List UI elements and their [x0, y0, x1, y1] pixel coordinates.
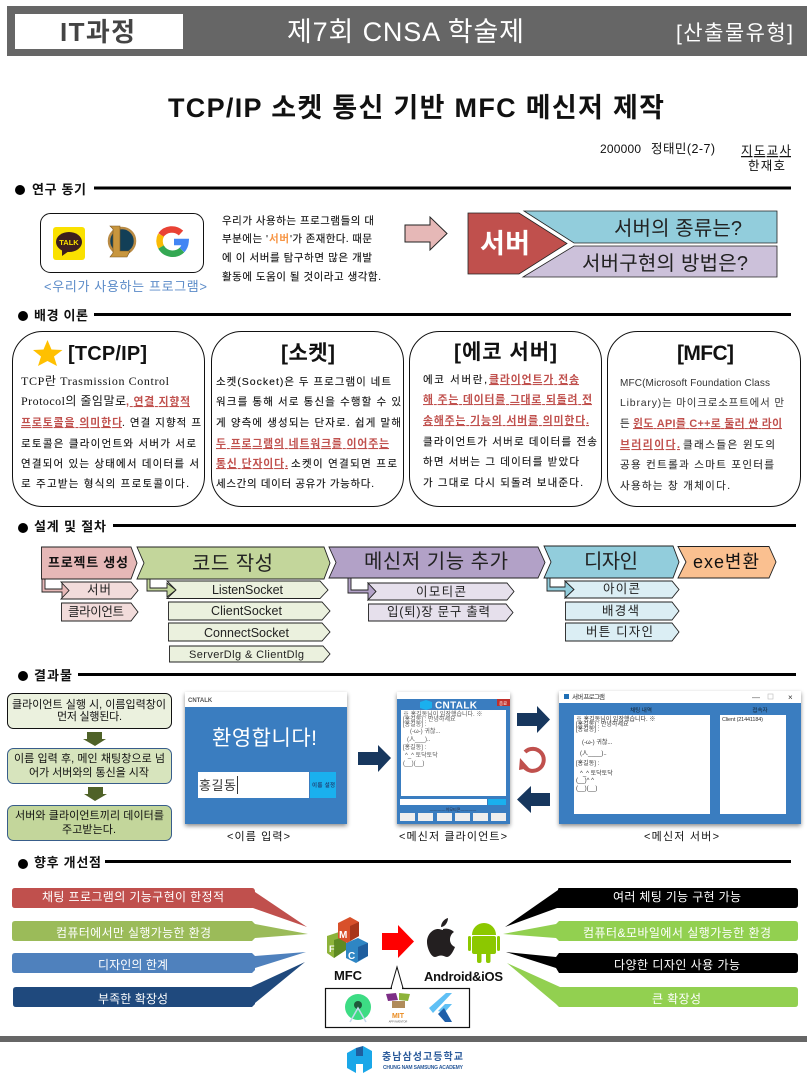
motivation text: 부분에는 ' — [222, 233, 268, 245]
text: echo server description: 송해주는 기능의 서버를 의미한다. — [423, 413, 589, 427]
item: emoticons: 이모티콘 — [416, 585, 466, 599]
text: echo server description: 에코 서버란, — [423, 374, 487, 386]
screenshot: messenger server: [홍길동] : — [576, 725, 600, 733]
text: echo server description: 해 주는 데이터를 그대로 되돌려 전 — [423, 392, 592, 406]
screenshot: messenger server: (__)^ ^ — [576, 778, 594, 784]
callout: mobile tools — [326, 967, 470, 1028]
screenshot: messenger client: [홍길동] : 안녕하세요 — [403, 715, 456, 723]
screenshot: name input — [185, 692, 347, 824]
text: socket description: 두 프로그램의 네트워크를 이어주는 — [216, 437, 389, 450]
advisor — [741, 144, 791, 173]
text: socket description: 소켓(Socket)은 두 프로그램이 네트 — [216, 376, 391, 388]
step 3 — [8, 806, 172, 840]
icon: Android Studio — [345, 994, 371, 1022]
diagram: server questions — [468, 211, 777, 277]
item: ServerDlg and ClientDlg — [170, 646, 330, 662]
text: MFC description: 공용 컨트롤과 스마트 포인터를 — [620, 459, 774, 471]
question: server implementation: 서버구현의 방법은? — [582, 252, 748, 275]
caption: messenger server: <메신저 서버> — [644, 830, 719, 843]
arrow: client to server — [517, 706, 550, 733]
heading: echo server: [에코 서버] — [454, 341, 557, 364]
heading: MFC: [MFC] — [677, 342, 734, 365]
item: ClientSocket: ClientSocket — [211, 604, 283, 618]
school name: 충남삼성고등학교 — [382, 1050, 463, 1063]
screenshot: messenger server: × — [788, 693, 793, 702]
heading: socket: [소켓] — [281, 342, 335, 365]
callout: computer and mobile: 컴퓨터&모바일에서 실행가능한 환경 — [583, 925, 771, 940]
icon: MFC cubes — [327, 917, 368, 963]
screenshot: messenger server: ※ 홍길동님이 입장했습니다. ※ — [576, 715, 655, 723]
question: server types: 서버의 종류는? — [614, 217, 742, 240]
screenshot: name input: CNTALK — [188, 698, 213, 704]
callout: design options — [506, 952, 798, 973]
question: server types — [524, 211, 777, 243]
screenshot: messenger client: CNTALK — [435, 700, 478, 712]
step: messenger features — [329, 547, 545, 578]
text: TCP/IP description: , 연결 지향적 — [126, 394, 190, 408]
arrow: to server — [405, 217, 447, 250]
step 2 — [8, 748, 172, 784]
callout: limited features: 채팅 프로그램의 기능구현이 한정적 — [42, 890, 224, 904]
screenshot: messenger client: (人___).. — [407, 736, 431, 743]
item: icon — [565, 581, 679, 598]
screenshot: messenger client: (__)(__) — [403, 761, 424, 767]
item: client: 클라이언트 — [68, 605, 124, 619]
screenshot: messenger server — [559, 691, 801, 824]
item: ConnectSocket: ConnectSocket — [204, 626, 290, 640]
screenshot: messenger client: ^_^ 토닥토닥 — [405, 752, 438, 759]
icon: Android — [468, 923, 500, 963]
icon: Flutter — [429, 993, 452, 1022]
advisor: 한재호 — [748, 159, 785, 173]
text: socket description: 세스간의 데이터 공유가 가능하다. — [216, 477, 374, 490]
item: server: 서버 — [87, 583, 111, 597]
icon: MIT App Inventor — [386, 993, 410, 1024]
callout: computer and mobile — [503, 921, 798, 941]
text: socket description: 통신 단자이다. — [216, 456, 288, 470]
text: TCP/IP description: 프로토콜을 의미한다 — [21, 415, 122, 429]
elbow arrow: code — [147, 579, 176, 597]
step 1: 먼저 실행된다. — [57, 710, 122, 723]
section heading: motivation: 연구 동기 — [32, 182, 86, 197]
text: MFC description: 윈도 API를 C++로 둘러 싼 라이 — [633, 417, 782, 430]
icon: refresh — [519, 749, 544, 771]
caption: programs: <우리가 사용하는 프로그램> — [44, 279, 207, 294]
cube M: M — [339, 930, 347, 941]
panel: TCP/IP — [12, 332, 204, 506]
callout: poor scalability: 부족한 확장성 — [98, 992, 168, 1006]
arrow: migration — [382, 925, 414, 958]
section heading: results — [18, 668, 796, 683]
icon: KakaoTalk — [53, 227, 85, 260]
item: ServerDlg and ClientDlg: ServerDlg & ClientDlg — [189, 649, 304, 661]
text: socket description: 소켓이 연결되면 프로 — [291, 458, 397, 470]
item: button design: 버튼 디자인 — [586, 625, 653, 639]
callout: high scalability: 큰 확장성 — [652, 992, 701, 1006]
item: icon: 아이콘 — [603, 582, 640, 596]
text: TCP/IP description: . 연결 지향적 프 — [122, 417, 201, 429]
text: echo server description: 가 그대로 다시 되돌려 보내준다. — [423, 477, 583, 489]
event title: 제7회 CNSA 학술제 — [287, 17, 524, 47]
heading: TCP/IP: [TCP/IP] — [68, 343, 147, 365]
callout: design options: 다양한 디자인 사용 가능 — [614, 958, 740, 972]
item: emoticons — [368, 583, 514, 600]
callout: multiple features — [505, 888, 798, 927]
server block: 서버 — [480, 229, 530, 259]
callout: limited features — [12, 888, 307, 927]
item: server — [61, 582, 138, 599]
step: exe conversion: exe변환 — [693, 552, 759, 572]
text: MFC description: 든 — [620, 418, 630, 430]
icon: school emblem — [347, 1046, 372, 1073]
school name in English: CHUNG NAM SAMSUNG ACADEMY — [383, 1065, 464, 1071]
screenshot: messenger server: (-ω-) 귀찮... — [582, 738, 613, 746]
screenshot: messenger client: 종료 — [499, 701, 507, 706]
text: MFC description: Library)는 마이크로소프트에서 만 — [620, 397, 784, 409]
item: ConnectSocket — [168, 623, 330, 641]
screenshot: name input: 홍길동 — [199, 778, 236, 793]
flow: procedure — [42, 546, 776, 662]
text: echo server description: 클라이언트가 서버로 데이터를 전송 — [423, 436, 597, 448]
callout: design limits: 디자인의 한계 — [98, 958, 168, 972]
step: code writing: 코드 작성 — [192, 552, 273, 575]
text: echo server description: 하면 서버는 그 데이터를 받았다 — [423, 455, 579, 468]
section heading: future improvements: 향후 개선점 — [34, 855, 101, 870]
text: TCP/IP description: 로 주고받는 형식의 프로토콜이다. — [21, 478, 189, 490]
screenshot: messenger server: ^_^ 토닥토닥 — [580, 770, 613, 777]
author — [600, 142, 715, 156]
icon: KakaoTalk: TALK — [59, 238, 79, 247]
screenshot: messenger server: Client (21441184) — [722, 717, 763, 723]
item: enter and exit message: 입(퇴)장 문구 출력 — [387, 605, 490, 619]
screenshot: messenger client — [397, 692, 510, 824]
text: TCP/IP description — [21, 374, 201, 490]
section heading: background — [18, 308, 791, 323]
category badge — [15, 14, 183, 49]
panel: echo server — [410, 332, 602, 506]
item: client — [62, 603, 138, 621]
author: 200000 — [600, 142, 641, 156]
text: MFC description — [620, 378, 784, 492]
caption: name input: <이름 입력> — [227, 830, 290, 843]
arrow down — [83, 732, 106, 746]
screenshot: messenger server: [홍길동] : — [576, 759, 600, 767]
callout: design limits — [12, 952, 306, 973]
elbow arrow: design — [547, 578, 574, 598]
step: design — [544, 546, 679, 578]
label: MFC: MFC — [334, 968, 363, 983]
section heading: design and procedure — [18, 519, 796, 534]
step 2: 어가 서버와의 통신을 시작 — [29, 766, 149, 779]
motivation text: 우리가 사용하는 프로그램들의 대 — [222, 214, 374, 227]
question: server implementation — [523, 246, 777, 277]
item: enter and exit message — [368, 604, 513, 621]
panel: socket — [212, 332, 404, 506]
screenshot: messenger client: (-ω-) 귀찮... — [410, 727, 441, 735]
cube F: F — [329, 944, 335, 954]
text: socket description — [216, 376, 401, 490]
screenshot: messenger server: [홍길동] : 안녕하세요 — [576, 720, 629, 728]
screenshot: messenger server: — — [752, 693, 760, 702]
screenshot: messenger client: ※ 홍길동님이 입장했습니다. ※ — [403, 710, 482, 718]
callout: high scalability — [507, 963, 798, 1007]
icon: star — [33, 340, 62, 366]
screenshot: name input: 환영합니다! — [212, 727, 317, 750]
category badge: IT과정 — [60, 17, 135, 47]
output type: [산출물유형] — [676, 22, 793, 45]
motivation text: '가 존재한다. 때문 — [290, 233, 372, 245]
section heading: motivation — [15, 182, 791, 197]
text: TCP/IP description: 연결되어 있는 상태에서 데이터를 서 — [21, 458, 199, 470]
step: exe conversion — [678, 546, 776, 578]
arrow down — [84, 787, 107, 801]
screenshot: name input: 이름 설정 — [312, 781, 335, 789]
cube C: C — [348, 951, 355, 962]
item: background colour: 배경색 — [602, 604, 639, 618]
icon: League of Legends — [109, 226, 135, 257]
flowchart: client steps — [8, 694, 172, 840]
screenshot: messenger client: [홍길동] : — [403, 743, 427, 751]
step 3: 서버와 클라이언트끼리 데이터를 — [15, 809, 164, 822]
screenshot: messenger server: (人____).. — [580, 750, 607, 757]
step: messenger features: 메신저 기능 추가 — [364, 550, 508, 573]
step: design: 디자인 — [584, 550, 638, 573]
item: ClientSocket — [168, 602, 330, 620]
text: TCP/IP description: TCP란 Trasmission Control — [21, 374, 170, 388]
advisor: 지도교사 — [741, 144, 791, 158]
title: TCP/IP 소켓 통신 기반 MFC 메신저 제작 — [168, 93, 664, 123]
arrow: to client — [358, 745, 391, 772]
motivation text — [222, 214, 381, 283]
text: echo server description — [423, 372, 597, 489]
server block — [468, 213, 567, 274]
section heading: background: 배경 이론 — [34, 308, 88, 323]
step: project creation — [42, 547, 137, 579]
item: ListenSocket — [167, 581, 328, 598]
screenshot: messenger server: 접속자 — [752, 706, 768, 714]
screenshot: messenger server: 채팅 내역 — [630, 706, 652, 714]
step: code writing — [137, 547, 330, 579]
text: MFC description: 브러리이다. — [620, 437, 680, 451]
icon: Google — [160, 229, 186, 254]
item: ListenSocket: ListenSocket — [212, 583, 284, 597]
icon: MIT App Inventor: MIT — [392, 1013, 405, 1020]
step 1: 클라이언트 실행 시, 이름입력창이 — [12, 698, 166, 711]
text: TCP/IP description: Protocol의 줄임말로 — [21, 394, 126, 408]
screenshot: messenger server: (__)(__) — [576, 786, 597, 792]
section heading: results: 결과물 — [34, 668, 72, 683]
screenshot: messenger client: ------------이모티콘------------ — [430, 806, 477, 812]
callout: multiple features: 여러 체팅 기능 구현 가능 — [613, 890, 741, 904]
screenshot: messenger client: [홍길동] : — [403, 720, 427, 728]
panel: MFC — [608, 332, 800, 506]
icon: MIT App Inventor: APP INVENTOR — [389, 1020, 407, 1024]
text: MFC description: 사용하는 창 개체이다. — [620, 479, 730, 492]
motivation text: 활동에 도움이 될 것이라고 생각함. — [222, 270, 381, 283]
text: socket description: 게 양측에 생성되는 단자로. 쉽게 말해 — [216, 416, 401, 429]
elbow arrow: project — [42, 579, 70, 598]
callout: computer only — [12, 921, 308, 941]
motivation text: 에 이 서버를 탐구하면 많은 개발 — [222, 251, 372, 264]
caption: messenger client: <메신저 클라이언트> — [399, 830, 507, 843]
text: MFC description: MFC(Microsoft Foundation Class — [620, 378, 770, 389]
item: background colour — [566, 602, 679, 620]
text: socket description: 워크를 통해 서로 통신을 수행할 수 있 — [216, 395, 401, 408]
text: echo server description: 클라이언트가 전송 — [489, 372, 579, 386]
school logo — [347, 1046, 464, 1073]
motivation text: 서버 — [269, 232, 289, 245]
header bar — [7, 6, 807, 56]
panel: programs we use — [40, 214, 204, 272]
footer bar — [0, 1036, 807, 1042]
section heading: future improvements — [18, 855, 791, 870]
label: Android and iOS: Android&iOS — [424, 969, 503, 984]
author: 정태민(2-7) — [651, 142, 715, 156]
screenshot: messenger server: 서버 프로그램 — [572, 692, 605, 701]
icon: Apple — [427, 918, 455, 957]
section heading: design and procedure: 설계 및 절차 — [34, 519, 106, 534]
step: project creation: 프로젝트 생성 — [48, 555, 128, 570]
item: button design — [566, 623, 679, 641]
text: TCP/IP description: 로토콜은 클라이언트와 서버가 서로 — [21, 438, 196, 450]
callout: computer only: 컴퓨터에서만 실행가능한 환경 — [56, 925, 211, 940]
text: MFC description: 클래스들은 윈도의 — [683, 438, 775, 451]
step 3: 주고받는다. — [62, 823, 116, 836]
elbow arrow: messenger — [348, 578, 376, 600]
step 1 — [8, 694, 172, 728]
callout: poor scalability — [13, 962, 305, 1007]
arrow: server to client — [517, 786, 550, 813]
step 2: 이름 입력 후, 메인 채팅창으로 넘 — [14, 752, 165, 765]
